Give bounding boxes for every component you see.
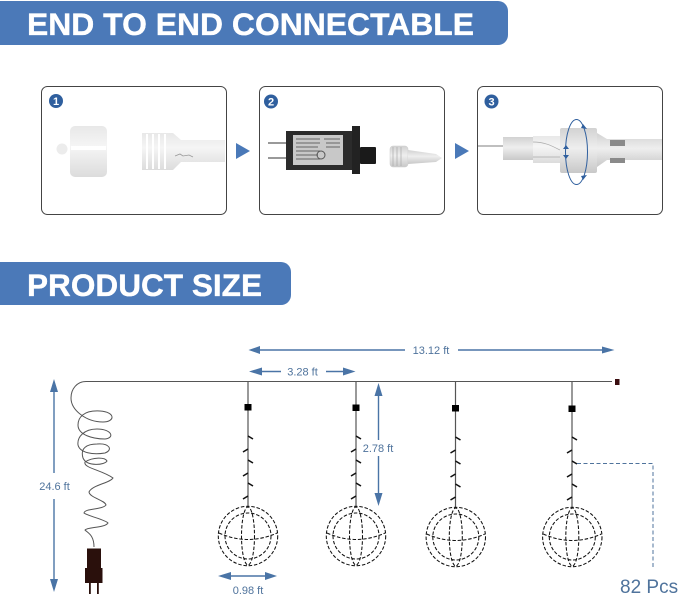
dimension: ball diameter 0.98 ft [218,572,277,596]
panel: step 2 [260,86,444,214]
main wire with coiled lead [71,381,612,547]
dimension: spacing 3.28 ft: 3.28 ft [287,366,318,378]
end cap [615,379,620,385]
icon: number 3 [484,94,498,108]
diagram: light string [71,379,620,594]
arrow: step 2 to 3 [455,143,469,159]
icon: threaded connector [142,133,225,170]
icon: end cap [56,126,107,177]
pendant 3 [426,382,485,567]
pendant 2 [326,382,386,566]
icon: plug [85,548,102,594]
pendant 1 [218,382,278,566]
callout: 82 pcs [577,464,678,596]
dimension: drop 2.78 ft [363,383,393,506]
panel: step 3 [478,86,662,214]
dimension: spacing 3.28 ft [249,366,356,378]
dimension: total length 13.12 ft: 13.12 ft [413,345,449,357]
dimension: lead 24.6 ft [39,379,70,592]
icon: rotation arrows [563,120,588,184]
dimension: total length 13.12 ft [248,345,614,357]
heading: product size: PRODUCT SIZE [27,267,262,303]
heading: end to end connectable: END TO END CONNECTABLE [27,6,474,42]
icon: number 2 [264,94,278,108]
heading: product size [0,262,291,305]
icon: joined connector [478,128,662,173]
icon: power adapter [268,126,376,174]
dimension: drop 2.78 ft: 2.78 ft [363,443,393,455]
pendant 4 [543,382,602,567]
icon: number 1 [49,94,63,108]
arrow: step 1 to 2 [236,143,250,159]
panel: step 1 [42,86,226,214]
icon: number 3: 3 [488,96,495,108]
icon: clear connector [390,146,442,167]
dimension: lead 24.6 ft: 24.6 ft [39,481,70,493]
icon: number 1: 1 [53,96,59,108]
icon: number 2: 2 [268,96,274,108]
